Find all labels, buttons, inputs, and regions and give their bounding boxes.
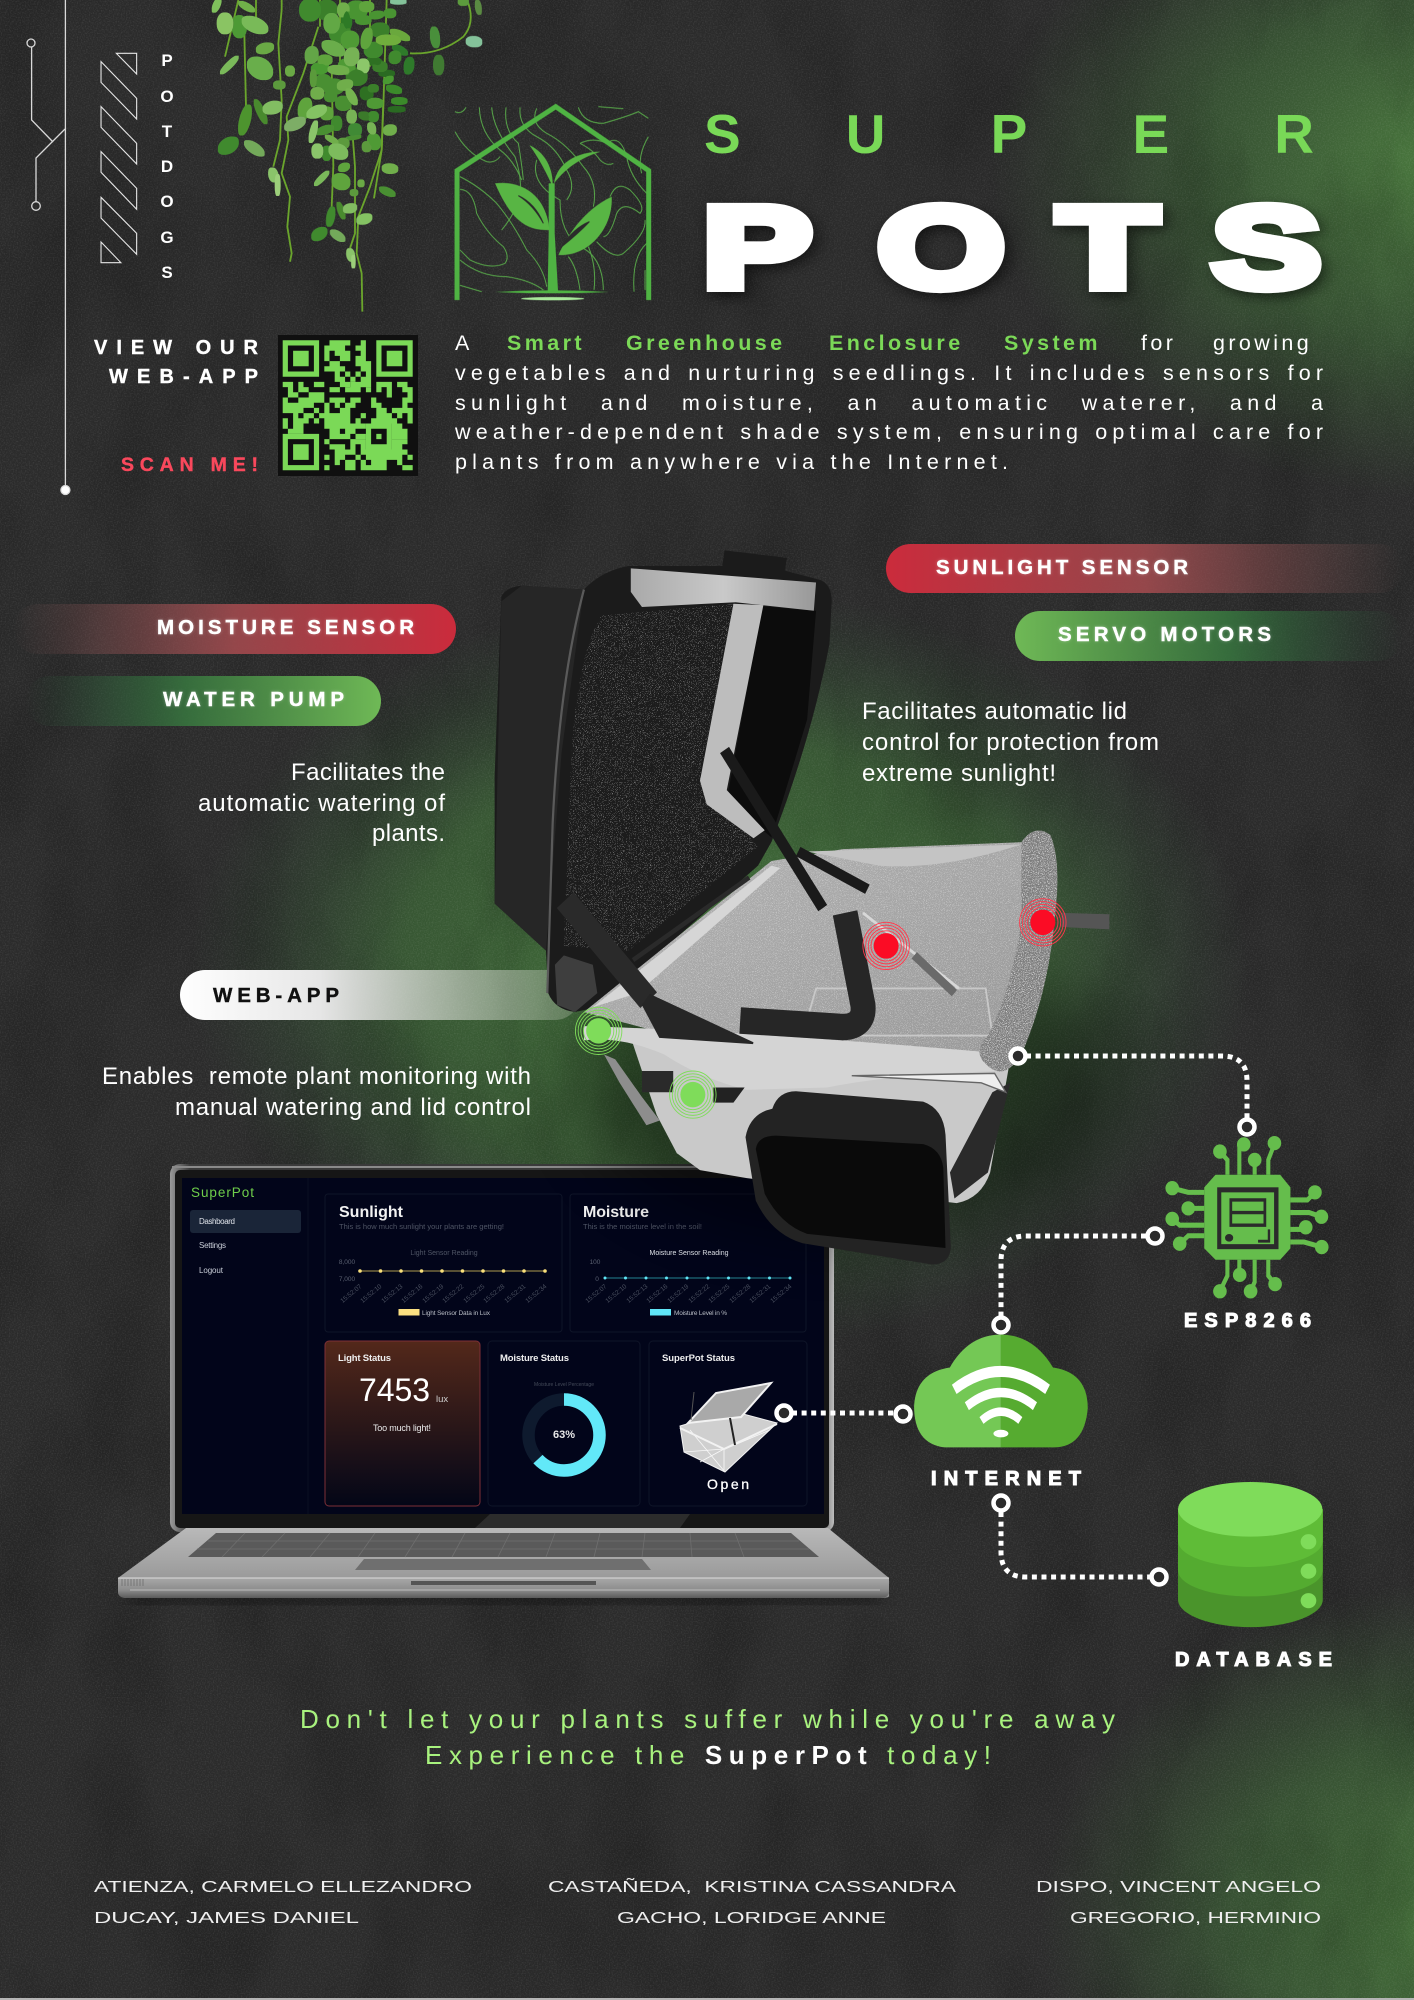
team name POTDOGS vertical: O <box>160 87 174 106</box>
title: POTS: POTS <box>703 183 1321 311</box>
circuit line decoration <box>27 0 70 494</box>
pill: moisture sensor: MOISTURE SENSOR <box>157 616 414 639</box>
team member names: CASTAÑEDA, KRISTINA CASSANDRA <box>548 1879 957 1896</box>
text: servo motors description: control for protection from <box>862 729 1159 756</box>
moisture chart card: 15:52:31 <box>748 1283 773 1305</box>
team name POTDOGS vertical: D <box>161 157 173 176</box>
moisture chart card: 15:52:25 <box>707 1283 732 1305</box>
foam strip <box>979 830 1057 1071</box>
web-app QR prompt text <box>94 337 259 476</box>
text: water pump description: automatic watering of <box>198 790 445 817</box>
moisture chart card: This is the moisture level in the soil! <box>583 1222 702 1231</box>
pot body <box>584 842 1024 1203</box>
moisture status card: Moisture Level Percentage <box>534 1382 594 1388</box>
light status card: 7453 <box>359 1372 430 1408</box>
hanging vine plant <box>211 0 482 312</box>
web-app QR prompt text: WEB-APP <box>109 366 258 388</box>
icon: wifi cloud <box>914 1335 1088 1447</box>
sunlight chart card: 8,000 <box>339 1259 356 1266</box>
light status card: Too much light! <box>373 1423 431 1433</box>
project description: System <box>1004 331 1101 355</box>
moisture chart card: 15:52:19 <box>666 1283 691 1305</box>
moisture chart card: 15:52:16 <box>645 1283 670 1305</box>
front lid <box>746 1091 951 1265</box>
light status card <box>325 1341 480 1506</box>
project description <box>454 331 1323 474</box>
label: ESP8266: ESP8266 <box>1184 1310 1311 1332</box>
moisture chart card: 15:52:34 <box>769 1283 794 1305</box>
project description: for <box>1141 331 1176 355</box>
dashboard sidebar: Settings <box>199 1241 226 1250</box>
text: web-app description: manual watering and lid control <box>175 1094 531 1121</box>
sunlight chart card: 15:52:19 <box>421 1283 446 1305</box>
light status card: lux <box>436 1394 448 1405</box>
pill: servo motors: SERVO MOTORS <box>1058 623 1271 646</box>
project description: plants from anywhere via the Internet. <box>455 450 1008 474</box>
project description: vegetables and nurturing seedlings. It includes sensors for <box>455 361 1323 385</box>
sunlight chart card <box>325 1194 562 1332</box>
text: servo motors description <box>862 698 1159 787</box>
pill: sunlight sensor: SUNLIGHT SENSOR <box>936 556 1188 579</box>
wireframe pot icon <box>680 1383 777 1472</box>
team member names: GREGORIO, HERMINIO <box>1070 1910 1321 1927</box>
project description: A <box>455 331 473 355</box>
sunlight chart card: 15:52:13 <box>380 1283 405 1305</box>
moisture status card: Moisture Status <box>500 1353 569 1364</box>
bracket and electronics <box>604 1054 745 1125</box>
sunlight chart card: 15:52:31 <box>503 1283 528 1305</box>
QR code <box>278 335 418 476</box>
logo: greenhouse with seedling <box>455 107 649 300</box>
moisture chart card: 15:52:22 <box>687 1283 712 1305</box>
project description: Enclosure <box>829 331 964 355</box>
laptop keyboard deck <box>118 1528 889 1598</box>
superpot status card: SuperPot Status <box>662 1353 735 1364</box>
sunlight chart card: 15:52:28 <box>482 1283 507 1305</box>
moisture chart card: 100 <box>590 1259 601 1266</box>
project description: growing <box>1213 331 1312 355</box>
pill: servo motors <box>1015 611 1403 661</box>
text: water pump description: plants. <box>372 820 445 847</box>
text: water pump description: Facilitates the <box>291 759 445 786</box>
team name POTDOGS vertical: T <box>162 122 173 141</box>
sunlight chart card: This is how much sunlight your plants are getting! <box>339 1222 504 1231</box>
dashboard sidebar: SuperPot <box>191 1185 254 1200</box>
sunlight chart card: 7,000 <box>339 1276 356 1283</box>
moisture chart card: 0 <box>595 1276 599 1283</box>
closing slogan: Don't let your plants suffer while you're away <box>300 1704 1115 1734</box>
laptop lid and bezel <box>170 1164 834 1532</box>
pill: water pump <box>25 676 381 726</box>
moisture chart card: 15:52:07 <box>584 1283 609 1305</box>
sensor indicators <box>575 899 1066 1118</box>
pill: moisture sensor <box>13 604 456 654</box>
sunlight chart card: 15:52:10 <box>359 1283 384 1305</box>
project description: sunlight and moisture, an automatic waterer, and a <box>455 391 1323 415</box>
moisture status card: 63% <box>553 1429 575 1441</box>
sunlight chart card: 15:52:25 <box>462 1283 487 1305</box>
title: SUPER: SUPER <box>704 103 1314 165</box>
superpot status card <box>649 1341 807 1506</box>
sunlight chart card: 15:52:34 <box>524 1283 549 1305</box>
sunlight chart card: 15:52:07 <box>339 1283 364 1305</box>
sunlight chart card: 15:52:16 <box>400 1283 425 1305</box>
sunlight chart card: 15:52:22 <box>441 1283 466 1305</box>
project description: Greenhouse <box>626 331 785 355</box>
icon: ESP8266 chip <box>1165 1136 1329 1298</box>
superpot status card: Open <box>707 1476 749 1492</box>
team member names: ATIENZA, CARMELO ELLEZANDRO <box>94 1879 472 1896</box>
dashboard sidebar: Logout <box>199 1266 224 1275</box>
moisture chart card: Moisture Sensor Reading <box>650 1250 729 1257</box>
dashboard sidebar: Dashboard <box>199 1217 235 1226</box>
dashboard sidebar <box>190 1178 308 1514</box>
pill: water pump: WATER PUMP <box>163 688 344 711</box>
moisture chart card: 15:52:10 <box>604 1283 629 1305</box>
moisture chart card: Moisture Level in % <box>674 1310 727 1317</box>
laptop shadow <box>130 1592 880 1604</box>
text: servo motors description: extreme sunlight! <box>862 760 1056 787</box>
sunlight chart card: Sunlight <box>339 1204 404 1221</box>
dotted connectors <box>792 1056 1247 1577</box>
team name POTDOGS vertical: P <box>161 51 173 70</box>
servo struts and pipes <box>565 750 959 1043</box>
team name POTDOGS vertical <box>160 51 174 282</box>
icon: database <box>1178 1482 1323 1627</box>
team name POTDOGS vertical: S <box>161 263 173 282</box>
pill: web-app: WEB-APP <box>213 984 339 1007</box>
text: servo motors description: Facilitates automatic lid <box>862 698 1127 725</box>
sunlight chart card: Light Sensor Data in Lux <box>422 1310 491 1317</box>
diagonal stripes decoration <box>101 53 137 263</box>
light status card: Light Status <box>338 1353 391 1364</box>
laptop with dashboard <box>118 1164 889 1598</box>
closing slogan: Experience the SuperPot today! <box>425 1740 991 1770</box>
project description: Smart <box>507 331 585 355</box>
team member names <box>94 1879 1321 1927</box>
moisture chart card <box>570 1194 806 1332</box>
connector rings <box>776 1048 1254 1584</box>
label: DATABASE: DATABASE <box>1175 1649 1332 1671</box>
moisture status card <box>488 1341 640 1506</box>
team member names: GACHO, LORIDGE ANNE <box>617 1910 886 1927</box>
sunlight chart card: Light Sensor Reading <box>410 1250 478 1257</box>
moisture chart card: 15:52:28 <box>728 1283 753 1305</box>
closing slogan <box>300 1704 1115 1770</box>
team name POTDOGS vertical: G <box>160 228 174 247</box>
label: INTERNET: INTERNET <box>931 1468 1081 1490</box>
pill: sunlight sensor <box>886 544 1404 593</box>
pot shadow <box>580 940 1120 1240</box>
web-app QR prompt text: SCAN ME! <box>121 454 258 476</box>
moisture chart card: Moisture <box>583 1204 649 1221</box>
pill: web-app <box>180 970 580 1020</box>
team member names: DISPO, VINCENT ANGELO <box>1036 1879 1321 1896</box>
text: web-app description: Enables remote plant monitoring with <box>102 1063 531 1090</box>
sunlight sensor stick <box>1062 913 1109 929</box>
text: water pump description <box>198 759 445 847</box>
team member names: DUCAY, JAMES DANIEL <box>94 1910 360 1927</box>
open lid with shade mesh <box>495 550 832 1012</box>
web-app QR prompt text: VIEW OUR <box>94 337 259 359</box>
project description: weather-dependent shade system, ensuring optimal care for <box>454 420 1323 444</box>
photo: SuperPot enclosure <box>495 550 1109 1265</box>
team name POTDOGS vertical: O <box>160 192 174 211</box>
moisture chart card: 15:52:13 <box>625 1283 650 1305</box>
text: web-app description <box>102 1063 531 1121</box>
